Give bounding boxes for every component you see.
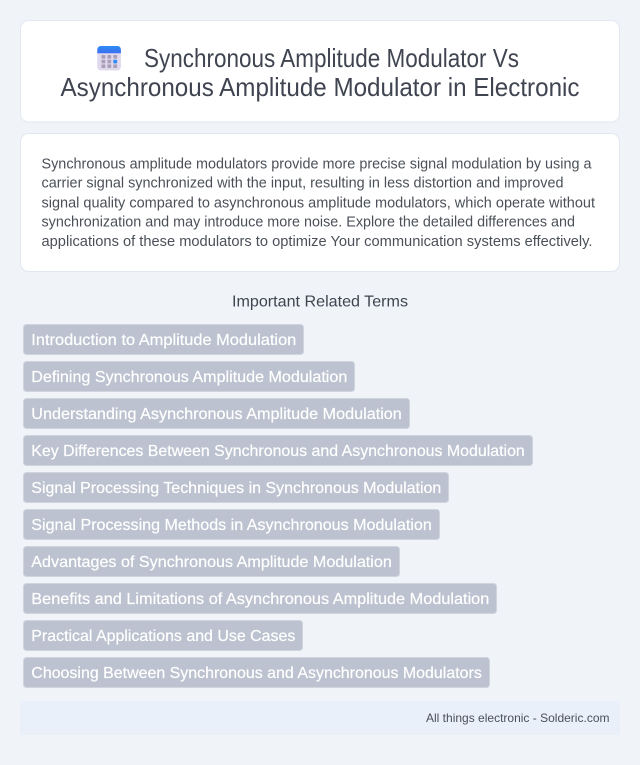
tag 3 [24, 398, 410, 428]
footer: All things electronic - Solderic.com [426, 711, 610, 725]
tag 9 [24, 620, 302, 650]
text block: description: applications of these modulators to optimize Your communication systems effectively. [42, 234, 592, 250]
tag 7: Advantages of Synchronous Amplitude Modulation [31, 554, 392, 571]
title [60, 45, 580, 102]
text block: description: synchronization and may introduce more noise. Explore the detailed differences and [42, 215, 575, 231]
tag 2 [24, 362, 354, 392]
title: Asynchronous Amplitude Modulator in Electronic [60, 74, 580, 102]
icon: calendar [97, 46, 121, 70]
tag list [24, 324, 532, 688]
tag 9: Practical Applications and Use Cases [31, 628, 295, 645]
tag 6: Signal Processing Methods in Asynchronous Modulation [31, 517, 432, 534]
tag 8: Benefits and Limitations of Asynchronous Amplitude Modulation [31, 591, 489, 608]
tag 3: Understanding Asynchronous Amplitude Modulation [31, 406, 402, 423]
text block: description: Synchronous amplitude modulators provide more precise signal modulation by using a [42, 156, 592, 172]
tag 4 [24, 436, 532, 466]
tag 2: Defining Synchronous Amplitude Modulation [31, 369, 347, 386]
tag 1: Introduction to Amplitude Modulation [31, 332, 296, 349]
tag 10 [24, 658, 490, 688]
tag 7 [24, 546, 400, 576]
text block: description: carrier signal synchronized with the input, resulting in less distortion and improved [42, 176, 564, 192]
title: Synchronous Amplitude Modulator Vs [144, 45, 519, 73]
text block: description [42, 156, 595, 250]
panel: description card [20, 134, 620, 272]
tag 10: Choosing Between Synchronous and Asynchronous Modulators [31, 665, 482, 682]
tag 4: Key Differences Between Synchronous and Asynchronous Modulation [31, 443, 525, 460]
footer [20, 701, 620, 735]
tag 5: Signal Processing Techniques in Synchronous Modulation [31, 480, 441, 497]
tag 1 [24, 324, 304, 354]
tag 5 [24, 472, 448, 502]
tag 8 [24, 584, 496, 614]
tag 6 [24, 510, 440, 540]
text block: description: signal quality compared to asynchronous amplitude modulators, which operate without [42, 195, 595, 211]
panel: title card [20, 20, 620, 122]
heading: important related terms: Important Related Terms [232, 294, 408, 311]
